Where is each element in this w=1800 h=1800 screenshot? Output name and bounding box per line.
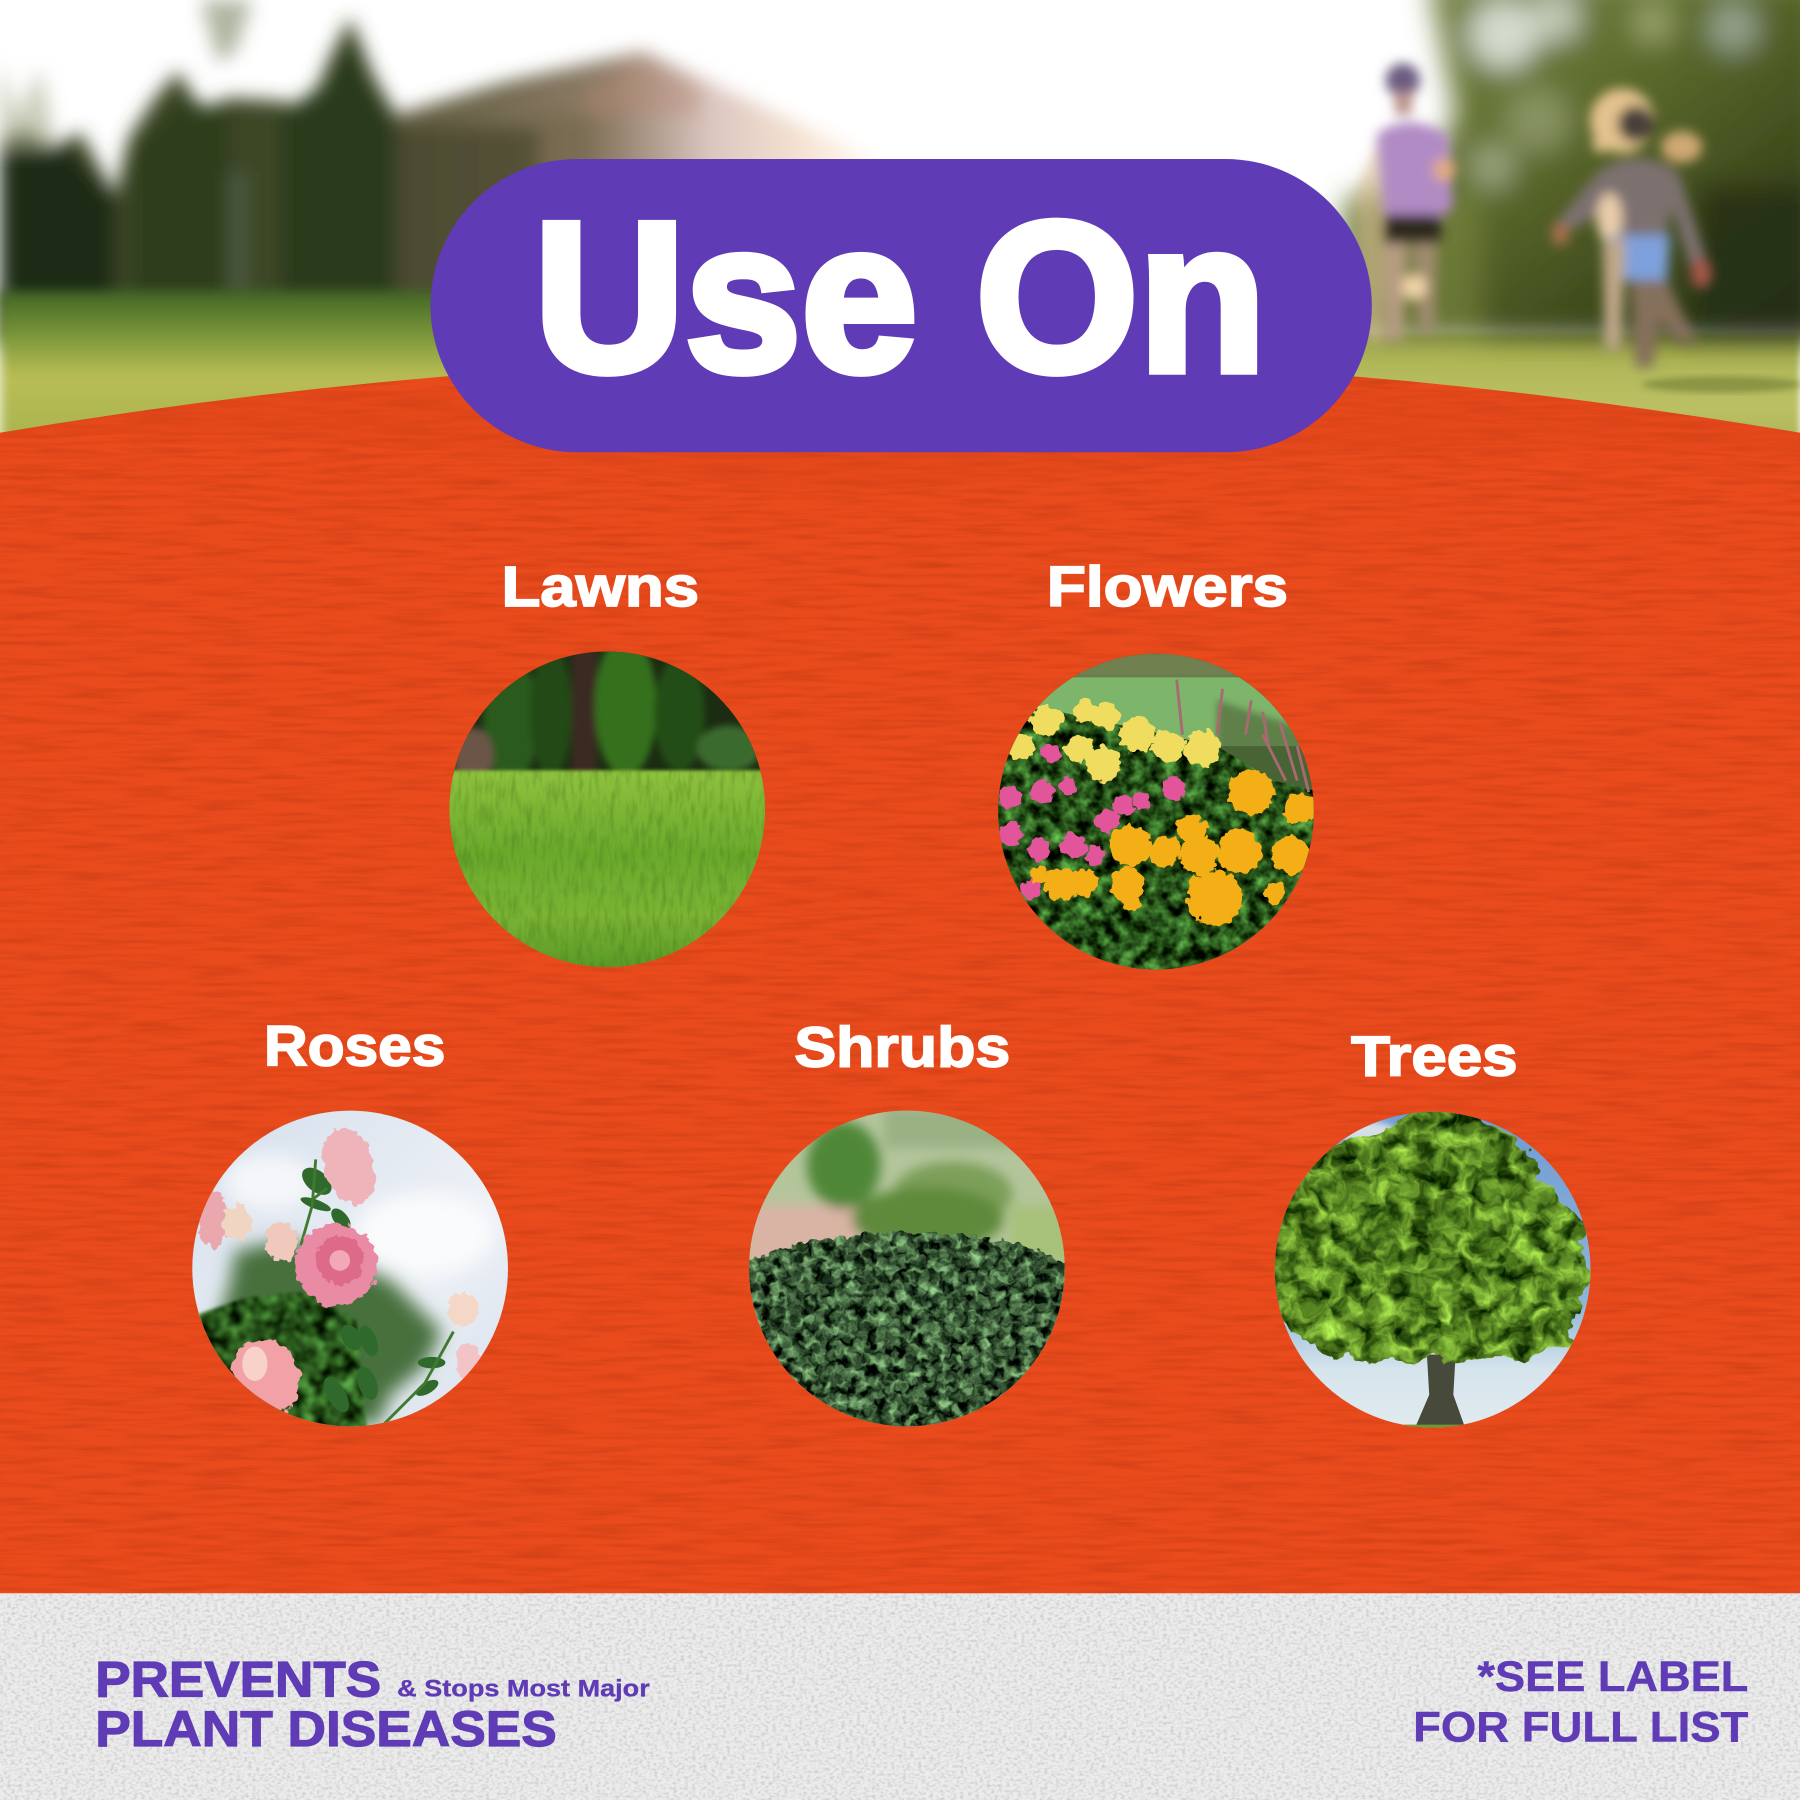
label: Roses: Roses xyxy=(264,1014,445,1077)
marigolds xyxy=(1008,700,1221,781)
item: Trees xyxy=(1263,1025,1596,1435)
photo: oak tree xyxy=(1263,1108,1596,1435)
photo: lawn xyxy=(449,652,766,968)
photo: flower bed xyxy=(993,649,1320,976)
item: Roses xyxy=(189,1014,517,1435)
label: Trees: Trees xyxy=(1351,1025,1518,1088)
footer note: see label: FOR FULL LIST xyxy=(1413,1703,1748,1750)
footer note: see label: *SEE LABEL xyxy=(1477,1653,1748,1700)
title pill xyxy=(430,159,1372,452)
item: Flowers xyxy=(993,555,1320,976)
photo: clipped hedge xyxy=(749,1110,1065,1426)
footer claim: prevents plant diseases: PREVENTS xyxy=(95,1651,381,1708)
label: Lawns: Lawns xyxy=(502,555,699,618)
photo: roses xyxy=(189,1108,517,1435)
grey plaster footer panel xyxy=(0,1593,1800,1800)
orange painted-wood panel xyxy=(0,344,1800,1593)
item: Shrubs xyxy=(749,1024,1065,1426)
footer claim: prevents plant diseases: PLANT DISEASES xyxy=(95,1700,557,1757)
pink reeds xyxy=(1177,680,1309,792)
child running left xyxy=(1355,63,1456,344)
background photo: children running toward house xyxy=(0,0,1800,482)
label: Flowers: Flowers xyxy=(1047,555,1288,618)
item: Lawns xyxy=(442,555,775,977)
footer claim: prevents plant diseases xyxy=(95,1651,650,1757)
child running right xyxy=(1552,88,1712,367)
footer claim: prevents plant diseases: & Stops Most Major xyxy=(397,1676,650,1703)
footer note: see label xyxy=(1413,1653,1748,1750)
golden daisies xyxy=(1030,769,1316,925)
label: Shrubs: Shrubs xyxy=(794,1015,1010,1078)
title text: Use On xyxy=(534,179,1266,417)
petunias xyxy=(998,743,1185,900)
